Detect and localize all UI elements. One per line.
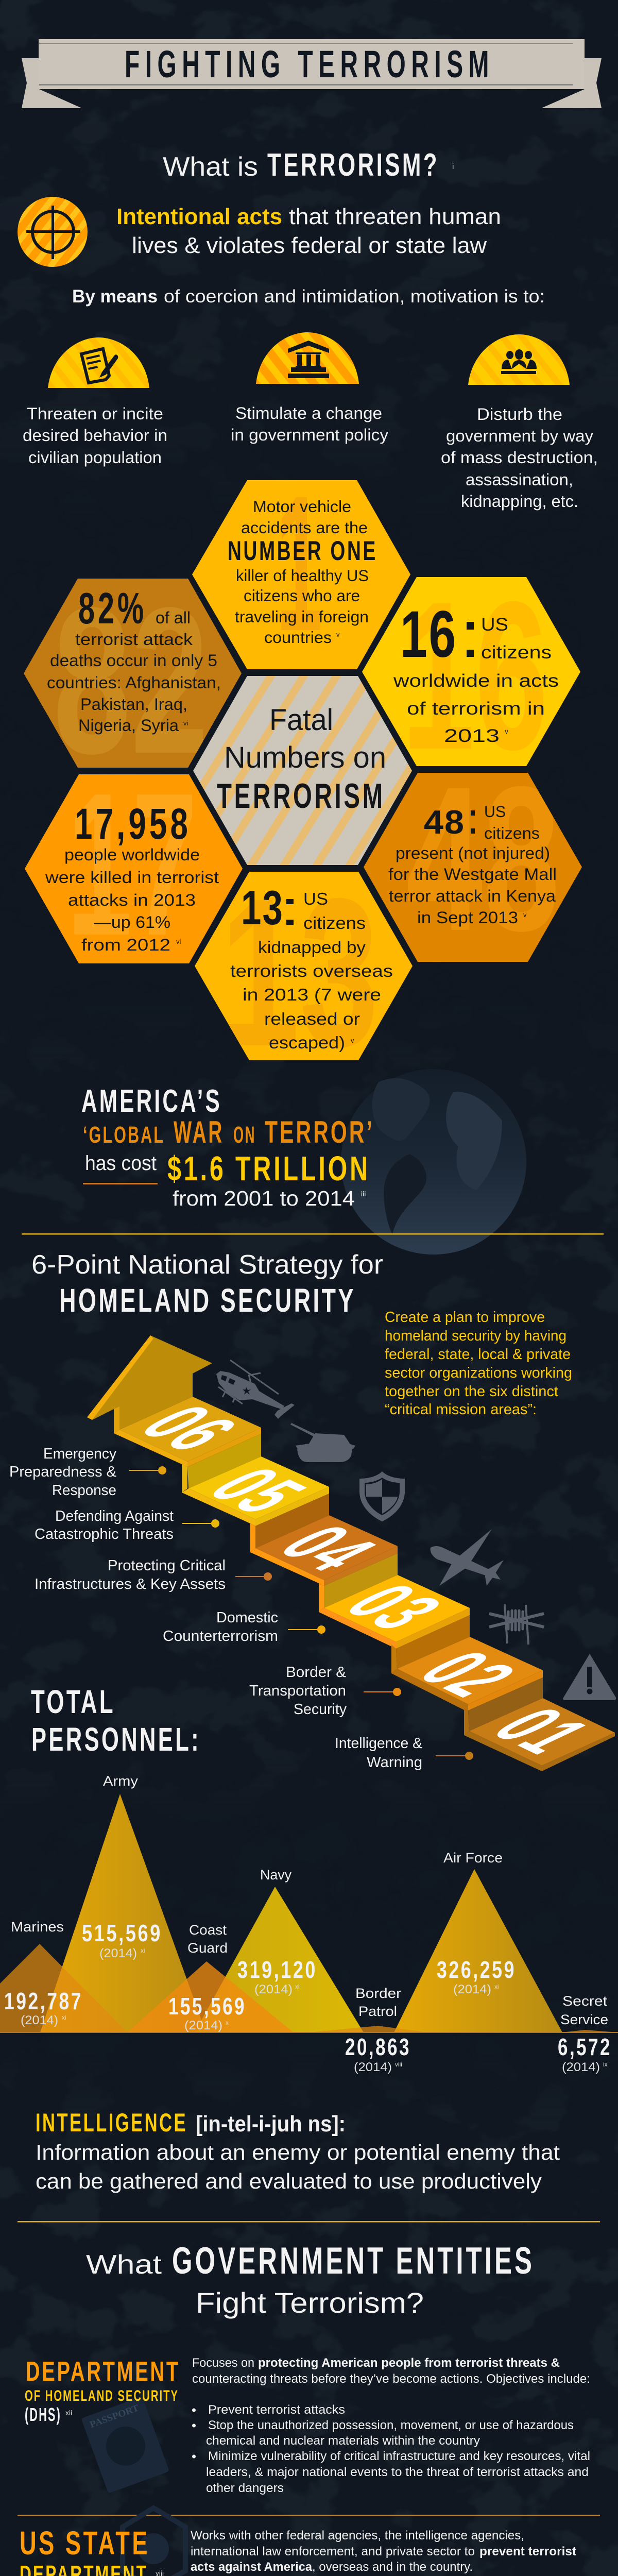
icon: notepad and pen [48,337,149,388]
hexagon: 13 citizens: in 2013 (7 were [243,986,381,1005]
label: border and transportation security: Security [294,1701,347,1718]
caption: in government policy [231,426,389,444]
text: plan description: homeland security by having [385,1328,566,1344]
icon: warning triangle [563,1654,616,1700]
agency name: (DHS) [25,2404,61,2425]
war on terror cost: $1.6 TRILLION [167,1149,370,1188]
hexagon: 82 percent [24,579,242,768]
hexagon: 48 citizens: present (not injured) [396,844,550,862]
hexagon: 16 citizens: citizens [481,642,552,663]
icon: state department hexagon [123,2508,185,2576]
label: protecting critical infrastructures [35,1557,272,1592]
stat: navy: 319,120 [237,1956,317,1983]
hexagon: 16 citizens: v [505,727,508,735]
hexagon: number one: citizens who are [244,587,360,605]
description [191,2529,576,2574]
description: , overseas and in the country. [312,2561,473,2574]
icon: shield [359,1471,405,1521]
definition: intelligence: [in-tel-i-juh ns]: [196,2112,346,2137]
hexagon: 82 percent: of all [156,608,191,627]
description: acts against America [191,2561,313,2574]
hexagon: 82 percent: 82% [78,584,147,633]
caption: kidnapping, etc. [461,492,578,511]
hexagon: 17,958 people: 17,958 [75,800,191,848]
definition text: lives & violates federal or state law [132,233,487,258]
step 04 [250,1515,400,1612]
description: leaders, & major national events to the threat of terrorist attacks and [206,2466,589,2479]
caption: Disturb the [477,405,562,423]
hexagon: 82 percent: countries: Afghanistan, [47,673,221,692]
hexagon: 13 citizens: citizens [303,914,366,933]
definition text [116,205,501,258]
definition: intelligence: can be gathered and evaluated to use productively [36,2169,542,2193]
mountain: marines [0,1944,127,2032]
label: border and transportation security: Transportation [249,1683,346,1699]
panel: department of homeland security [25,2356,590,2495]
means intro text: By means [72,286,158,307]
caption: Threaten or incite [27,404,163,423]
stat: army: Army [103,1773,139,1789]
title banner [22,39,602,108]
description: Minimize vulnerability of critical infrastructure and key resources, vital [208,2450,590,2463]
hexagon: 16 citizens: worldwide in acts [393,670,559,691]
icon: passport: PASSPORT [88,2402,141,2430]
hexagon: 48 citizens: for the Westgate Mall [388,865,557,884]
label: border and transportation security: Border & [286,1664,346,1681]
hexagon: number one: Motor vehicle [253,498,351,516]
heading: what is terrorism: i [452,162,454,171]
mountain: army [40,1794,206,2032]
caption: government by way [446,427,594,445]
step 02: 02 [398,1641,539,1708]
heading: what is terrorism [163,147,454,183]
agency name [20,2524,164,2576]
war on terror cost: iii [361,1190,366,1198]
icon: government building [256,332,359,384]
hexagon: 16 citizens: US [481,614,508,635]
stat: border patrol [345,1986,411,2074]
stat: air force: xi [494,1983,499,1990]
description: international law enforcement, and private sector to [191,2545,475,2558]
definition: intelligence: INTELLIGENCE [36,2108,187,2137]
means intro text: of coercion and intimidation, motivation is to: [164,286,545,307]
hexagon: number one: killer of healthy US [236,567,369,585]
heading: what is terrorism: What is [163,151,258,181]
text: plan description: sector organizations working [385,1365,572,1381]
icon: barbed wire [489,1604,544,1645]
stat: marines: (2014) [21,2014,58,2027]
stat: army [82,1773,162,1960]
label: domestic counterterrorism: Domestic [216,1609,278,1626]
agency name: xii [65,2409,72,2417]
label: border and transportation security [249,1664,401,1718]
stat: coast guard: 155,569 [168,1993,246,2020]
stat: army: xi [141,1947,145,1954]
caption [23,404,167,467]
stat: secret service: Service [560,2012,608,2027]
hexagon: 17,958 people: from 2012 [81,936,170,954]
hexagon: 17,958 people: 17 [67,750,197,978]
agency name: US STATE [20,2524,150,2562]
definition text: that threaten human [289,205,501,229]
hexagon: 48 citizens: 48 [424,803,465,841]
heading: total personnel [31,1683,201,1758]
stat: border patrol: viii [395,2061,402,2068]
mountain: border patrol [309,2026,427,2032]
hexagon: 17,958 people: attacks in 2013 [68,891,196,909]
hexagon: 82 percent: terrorist attack [75,630,193,649]
label: protecting critical infrastructures: Protecting Critical [108,1557,226,1574]
stat: navy [237,1867,317,1996]
text: plan description: Create a plan to improve [385,1309,545,1326]
hexagon: 13 citizens: US [303,890,328,909]
label: domestic counterterrorism [163,1609,325,1645]
stat: air force: 326,259 [437,1956,516,1983]
hexagon: 82 percent: vi [183,719,188,727]
step 05: 05 [188,1458,329,1524]
stat: air force: Air Force [443,1850,503,1866]
hexagon: 13 citizens: escaped) [269,1033,345,1053]
staircase arrow chart [87,1335,615,1771]
heading: homeland security strategy [31,1249,383,1319]
label: intelligence and warning: Warning [367,1754,422,1771]
description: Works with other federal agencies, the intelligence agencies, [191,2529,524,2543]
heading: homeland security strategy: HOMELAND SECURITY [59,1282,356,1319]
description: protecting American people from terrorist threats & [258,2357,560,2370]
hexagon: number one: NUMBER ONE [228,536,377,566]
step 06 [114,1396,261,1493]
stat: air force: (2014) [453,1983,491,1996]
hexagon: 17,958 people: vi [176,938,181,945]
hexagon: number one: countries [264,629,332,647]
hexagon: 13 citizens: v [351,1037,354,1044]
icon: group of people [468,334,570,385]
stat: marines: xi [62,2014,66,2021]
agency name [25,2356,180,2425]
hexagon: 13 citizens: released or [264,1010,360,1029]
description [192,2357,590,2495]
hexagon: 82 percent: Nigeria, Syria [78,716,179,735]
description: prevent terrorist [479,2545,576,2558]
label: intelligence and warning: Intelligence & [335,1735,422,1752]
hexagon: 48 citizens: in Sept 2013 [417,908,518,927]
description: Focuses on [192,2357,254,2370]
stat: border patrol: Patrol [358,2004,397,2019]
stat: air force [437,1850,516,1996]
stat: secret service [558,1993,612,2074]
stat: navy: xi [295,1983,300,1990]
heading: what is terrorism: TERRORISM? [267,147,439,183]
agency name: DEPARTMENT [26,2356,180,2387]
label: emergency preparedness: Response [52,1482,116,1499]
stat: coast guard: (2014) [184,2019,222,2032]
step 03 [319,1574,470,1673]
hexagon: 82 percent: Pakistan, Iraq, [80,695,187,714]
mountain: coast guard [127,1961,294,2032]
caption: assassination, [466,470,573,489]
mountain: navy [195,1887,364,2032]
globe illustration [341,1069,526,1255]
hexagon: center heading fatal numbers on terrorism: Numbers on [224,741,386,774]
caption: desired behavior in [23,426,167,445]
stat: navy: (2014) [254,1983,293,1996]
stat: border patrol: (2014) [354,2061,392,2074]
heading: total personnel: PERSONNEL: [31,1721,201,1758]
text: plan description: “critical mission areas”: [385,1401,537,1418]
stat: coast guard: Coast [189,1922,227,1938]
panel: motivation column 2 [231,332,389,444]
step 03: 03 [324,1574,466,1641]
hexagon: 13 citizens: kidnapped by [258,938,366,957]
stat: army: 515,569 [82,1920,162,1946]
hexagon: 82 percent: 82 [53,564,209,797]
chart: personnel mountains [0,1794,618,2033]
stat: marines [4,1919,83,2027]
caption [441,405,598,511]
stat: marines: Marines [11,1919,64,1935]
stat: navy: Navy [260,1867,292,1883]
icon: tank [290,1423,355,1462]
stat: secret service: Secret [562,1993,608,2009]
caption: Stimulate a change [235,404,382,422]
stat: coast guard: x [226,2019,229,2026]
heading: what government entities fight terrorism: Fight Terrorism? [196,2286,424,2319]
definition: intelligence [36,2108,560,2193]
hexagon: 16 citizens: 16 [400,598,457,671]
war on terror cost: AMERICA’S [81,1083,222,1119]
step 06: 06 [119,1396,261,1462]
label: protecting critical infrastructures: Infrastructures & Key Assets [35,1576,226,1592]
hexagon: 17,958 people: were killed in terrorist [45,868,219,887]
stat: marines: 192,787 [4,1988,83,2014]
definition text: Intentional acts [116,205,282,229]
label: emergency preparedness: Emergency [43,1446,116,1462]
hexagon: number one: traveling in foreign [235,608,369,626]
caption: civilian population [28,448,162,467]
mountain: air force [394,1869,562,2032]
hexagon: 16 citizens: 2013 [444,725,500,746]
panel: fatal numbers hexagons [24,456,582,1090]
step 02 [391,1637,543,1735]
heading: what government entities fight terrorism: What [86,2249,162,2279]
hexagon: number one [192,480,410,669]
mountain: secret service [561,2030,618,2032]
hexagon: 82 percent: deaths occur in only 5 [50,651,217,670]
war on terror cost: from 2001 to 2014 [173,1187,355,1210]
label: emergency preparedness [9,1446,166,1499]
hexagon: 17,958 people: —up 61% [94,913,170,931]
label: domestic counterterrorism: Counterterrorism [163,1628,278,1645]
hexagon: 48 citizens [364,773,582,962]
description: Stop the unauthorized possession, movement, or use of hazardous [208,2419,574,2432]
description: Prevent terrorist attacks [208,2403,345,2417]
hexagon: 16 citizens [362,577,580,766]
step 04: 04 [259,1516,400,1582]
hexagon: number one: accidents are the [241,519,368,537]
hexagon: 13 citizens: 13 [220,854,379,1090]
panel: us state department [20,2508,576,2576]
hexagon: 13 citizens: 13 [241,880,284,935]
panel: motivation column 1 [23,337,167,467]
war on terror cost: TERROR’ [265,1115,374,1149]
label: defending against catastrophic threats: Catastrophic Threats [35,1526,174,1543]
heading: what government entities fight terrorism [86,2240,535,2319]
hexagon: 17,958 people [25,774,243,963]
hexagon: 48 citizens: v [523,911,527,919]
stat: army: (2014) [99,1947,137,1960]
stat: coast guard [168,1922,246,2032]
panel: motivation column 3 [441,334,598,511]
hexagon: 16 citizens: of terrorism in [407,698,545,719]
hexagon: 13 citizens: terrorists overseas [230,962,393,981]
hexagon: 48 citizens: citizens [484,824,540,842]
stat: secret service: ix [603,2061,608,2068]
label: defending against catastrophic threats: Defending Against [55,1508,174,1524]
text: plan description [385,1309,572,1418]
stat: coast guard: Guard [187,1940,228,1956]
war on terror cost: ‘GLOBAL [83,1122,165,1148]
hexagon: center heading fatal numbers on terrorism: Fatal [269,703,333,737]
hexagon: center heading fatal numbers on terrorism [193,676,412,865]
stat: secret service: (2014) [562,2061,600,2074]
text: plan description: together on the six distinct [385,1383,558,1400]
label: defending against catastrophic threats [35,1508,219,1543]
hexagon: 48 citizens: terror attack in Kenya [389,887,556,905]
description: other dangers [206,2482,284,2495]
icon: crosshair target [18,197,88,267]
description: counteracting threats before they’ve become actions. Objectives include: [192,2372,590,2386]
hexagon: 48 citizens: US [484,803,506,821]
label: emergency preparedness: Preparedness & [9,1464,116,1480]
hexagon: center heading fatal numbers on terrorism: TERRORISM [217,776,385,816]
war on terror cost: ON [233,1122,256,1148]
caption [231,404,389,444]
stat: border patrol: Border [355,1986,401,2001]
step 05 [182,1456,329,1552]
war on terror cost [81,1083,374,1210]
stat: border patrol: 20,863 [345,2033,411,2060]
text: plan description: federal, state, local & private [385,1346,571,1363]
definition: intelligence: Information about an enemy or potential enemy that [36,2140,560,2164]
description: chemical and nuclear materials within the country [206,2434,480,2448]
heading: total personnel: TOTAL [31,1683,115,1720]
icon: passport [81,2396,169,2494]
agency name: OF HOMELAND SECURITY [25,2387,179,2404]
arrow head [87,1335,212,1433]
war on terror cost: WAR [174,1115,224,1149]
heading: homeland security strategy: 6-Point National Strategy for [31,1249,383,1279]
war on terror cost: has cost [85,1152,157,1175]
hexagon: number one: 1 [276,456,322,671]
caption: of mass destruction, [441,448,598,467]
hexagon: number one: v [336,631,340,638]
label: intelligence and warning [335,1735,473,1771]
icon: airplane [431,1529,504,1586]
hexagon: 17,958 people: people worldwide [64,845,200,864]
icon: helicopter [216,1360,295,1419]
